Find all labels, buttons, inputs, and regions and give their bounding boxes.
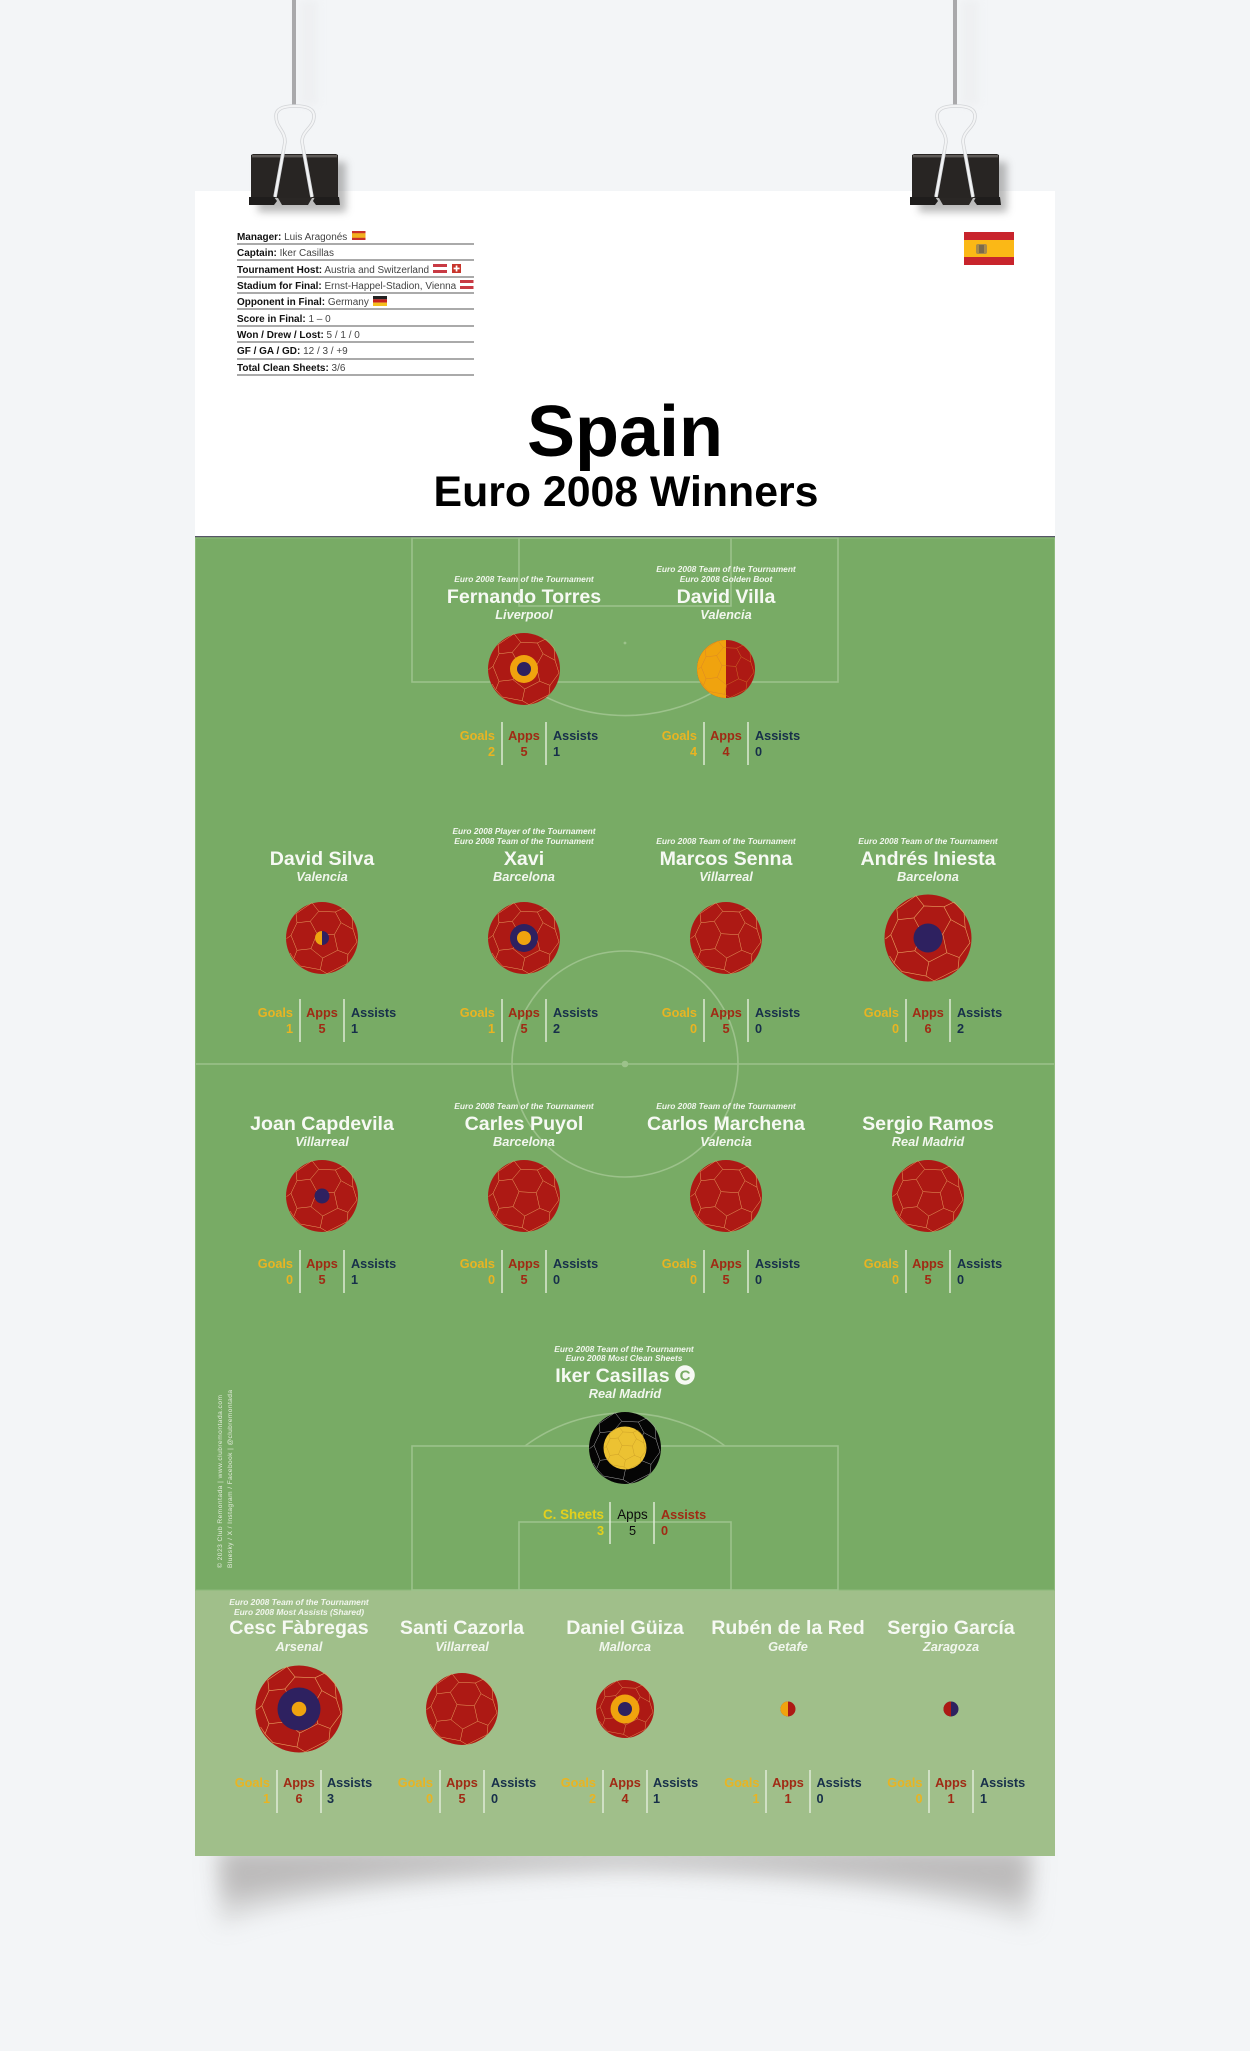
stats: 5: [318, 1022, 326, 1036]
substitute: Daniel Güiza: [561, 1617, 698, 1813]
row: manager: [237, 231, 474, 244]
stats: 0: [957, 1273, 964, 1287]
stats: Goals: [258, 1257, 293, 1271]
substitute: Cesc Fàbregas: [229, 1597, 372, 1813]
stats: Assists: [653, 1776, 698, 1790]
stats: 0: [892, 1022, 899, 1036]
ball: [697, 640, 755, 698]
row: clean sheets: Total Clean Sheets: 3/6: [237, 363, 346, 374]
player: Xavi: [452, 826, 598, 1042]
ball: [690, 1160, 762, 1232]
subtitle: Euro 2008 Winners: [434, 468, 818, 516]
row: opponent: [237, 296, 474, 309]
substitute: Rubén de la Red: [711, 1617, 865, 1813]
player: Carlos Marchena: Euro 2008 Team of the Tournament: [656, 1101, 797, 1111]
stats: 0: [755, 1273, 762, 1287]
stats: 1: [351, 1022, 358, 1036]
player: Fernando Torres: Fernando Torres: [447, 586, 601, 608]
stats: 0: [488, 1273, 495, 1287]
substitute: Sergio García: Sergio García: [887, 1617, 1016, 1639]
stats: Assists: [755, 729, 800, 743]
player: David Silva: David Silva: [270, 848, 375, 870]
ball: [488, 633, 560, 705]
stats: Assists: [553, 1006, 598, 1020]
stats: Assists: [816, 1776, 862, 1790]
stats: 0: [553, 1273, 560, 1287]
stats: Assists: [351, 1006, 396, 1020]
stats: 5: [520, 745, 528, 759]
icon: left binder clip: [249, 106, 346, 212]
player: Carlos Marchena: Valencia: [700, 1134, 752, 1149]
player: Sergio Ramos: Sergio Ramos: [862, 1113, 994, 1135]
stats: [460, 999, 598, 1042]
row: opponent: Opponent in Final: Germany: [237, 297, 369, 308]
ball: [944, 1702, 958, 1716]
player: Fernando Torres: Liverpool: [495, 607, 553, 622]
stats: [543, 1502, 706, 1544]
player: Joan Capdevila: Joan Capdevila: [250, 1113, 395, 1135]
row: score: Score in Final: 1 – 0: [237, 314, 331, 325]
stats: 0: [661, 1524, 668, 1538]
stats: Assists: [755, 1257, 800, 1271]
stats: Goals: [662, 1257, 697, 1271]
player: David Villa: [656, 564, 800, 765]
credit: © 2023 Club Remontada | www.clubremontada.com: [216, 1394, 224, 1568]
stats: 2: [957, 1022, 964, 1036]
player: Carles Puyol: Euro 2008 Team of the Tournament: [454, 1101, 595, 1111]
row: manager: Manager: Luis Aragonés: [237, 232, 347, 243]
stats: 3: [327, 1792, 334, 1806]
stats: 0: [690, 1022, 697, 1036]
player: Andrés Iniesta: Andrés Iniesta: [860, 848, 997, 870]
player: Carlos Marchena: Carlos Marchena: [647, 1113, 806, 1135]
player: Marcos Senna: Villarreal: [699, 869, 753, 884]
substitute: Sergio García: Zaragoza: [922, 1639, 979, 1654]
player: Iker Casillas: Euro 2008 Team of the Tournament: [554, 1344, 695, 1354]
stats: 0: [286, 1273, 293, 1287]
stats: Assists: [755, 1006, 800, 1020]
stats: [460, 722, 598, 765]
stats: Goals: [460, 1006, 495, 1020]
stats: Apps: [710, 1006, 742, 1020]
stats: Goals: [864, 1006, 899, 1020]
stats: Apps: [446, 1776, 478, 1790]
ball: [780, 1702, 796, 1716]
stats: Apps: [508, 729, 540, 743]
stats: 1: [351, 1273, 358, 1287]
player: Iker Casillas: Euro 2008 Most Clean Sheets: [566, 1353, 683, 1363]
stats: 0: [915, 1792, 922, 1806]
stats: 0: [755, 745, 762, 759]
stats: Assists: [491, 1776, 536, 1790]
substitute: Sergio García: [887, 1617, 1025, 1813]
stats: 1: [784, 1792, 792, 1806]
icon: captain badge: C: [680, 1368, 691, 1384]
player: Marcos Senna: [656, 836, 800, 1042]
row: tournament host: [237, 264, 474, 277]
ball: [884, 894, 972, 982]
poster drop shadow: [215, 1850, 1035, 1925]
player: Iker Casillas: [543, 1344, 706, 1544]
stats: Apps: [306, 1257, 338, 1271]
stats: [662, 722, 800, 765]
player: David Villa: Euro 2008 Team of the Tournament: [656, 564, 797, 574]
player: Sergio Ramos: Real Madrid: [892, 1134, 965, 1149]
stats: 1: [263, 1792, 270, 1806]
stats: Goals: [864, 1257, 899, 1271]
substitute: Cesc Fàbregas: Arsenal: [275, 1639, 323, 1654]
substitute: Rubén de la Red: Getafe: [768, 1639, 808, 1654]
icon: Spain flag: [964, 232, 1014, 265]
substitute: Santi Cazorla: Villarreal: [435, 1639, 489, 1654]
player: Marcos Senna: Marcos Senna: [660, 848, 794, 870]
stats: [398, 1770, 536, 1813]
stats: C. Sheets: [543, 1507, 604, 1522]
stats: 0: [892, 1273, 899, 1287]
stats: Apps: [935, 1776, 967, 1790]
stats: [864, 1250, 1002, 1293]
stats: 5: [722, 1273, 730, 1287]
ball: [256, 1666, 342, 1752]
stats: Apps: [508, 1257, 540, 1271]
player: David Silva: Valencia: [296, 869, 348, 884]
stats: Apps: [912, 1006, 944, 1020]
player: Carles Puyol: Barcelona: [493, 1134, 555, 1149]
stats: Apps: [617, 1507, 648, 1522]
substitute: Daniel Güiza: Daniel Güiza: [566, 1617, 685, 1639]
player: Andrés Iniesta: Euro 2008 Team of the Tournament: [858, 836, 999, 846]
stats: Assists: [957, 1257, 1002, 1271]
stats: [258, 999, 396, 1042]
player: Fernando Torres: [447, 574, 601, 765]
substitute: Cesc Fàbregas: Euro 2008 Team of the Tournament: [229, 1597, 370, 1607]
substitutes band: [195, 1590, 1055, 1856]
substitute: Cesc Fàbregas: Cesc Fàbregas: [229, 1617, 369, 1639]
icon: captain badge: [675, 1365, 695, 1385]
player: Joan Capdevila: [250, 1113, 396, 1293]
pitch markings: [196, 538, 1054, 1590]
stats: [258, 1250, 396, 1293]
stats: 1: [653, 1792, 660, 1806]
substitute: Cesc Fàbregas: Euro 2008 Most Assists (Shared): [234, 1607, 364, 1617]
stats: 1: [947, 1792, 955, 1806]
stats: 1: [553, 745, 560, 759]
header rule: [195, 536, 1055, 537]
row: captain: Captain: Iker Casillas: [237, 248, 334, 259]
player: Joan Capdevila: Villarreal: [295, 1134, 349, 1149]
stats: Goals: [724, 1776, 760, 1790]
ball: [426, 1673, 498, 1745]
stats: 0: [426, 1792, 433, 1806]
stats: [235, 1770, 372, 1813]
stats: Apps: [912, 1257, 944, 1271]
stats: Assists: [327, 1776, 372, 1790]
ball: [596, 1680, 654, 1738]
stats: Apps: [710, 1257, 742, 1271]
player: Xavi: Euro 2008 Team of the Tournament: [454, 836, 595, 846]
stats: 5: [318, 1273, 326, 1287]
stats: Goals: [662, 729, 697, 743]
player: Andrés Iniesta: [858, 836, 1002, 1042]
stats: 6: [295, 1792, 303, 1806]
title: Spain: [527, 392, 723, 472]
stats: 2: [553, 1022, 560, 1036]
ball: [690, 902, 762, 974]
stats: Goals: [561, 1776, 596, 1790]
icon: right binder clip: [910, 106, 1007, 212]
stats: Assists: [661, 1508, 706, 1522]
player: Fernando Torres: Euro 2008 Team of the Tournament: [454, 574, 595, 584]
stats: 2: [488, 745, 495, 759]
stats: 5: [458, 1792, 466, 1806]
player: Carlos Marchena: [647, 1101, 806, 1293]
stats: [662, 999, 800, 1042]
stats: Goals: [235, 1776, 270, 1790]
substitute: Santi Cazorla: Santi Cazorla: [400, 1617, 525, 1639]
ball: [286, 902, 358, 974]
player: Iker Casillas: Real Madrid: [589, 1386, 662, 1401]
stats: 2: [589, 1792, 596, 1806]
stats: 1: [980, 1792, 987, 1806]
row: tournament host: Tournament Host: Austria and Switzerland: [237, 265, 429, 276]
stats: Apps: [283, 1776, 315, 1790]
stats: 0: [690, 1273, 697, 1287]
stats: Goals: [258, 1006, 293, 1020]
stats: 3: [597, 1524, 604, 1538]
row: stadium: Stadium for Final: Ernst-Happel-Stadion, Vienna: [237, 281, 457, 292]
stats: 0: [491, 1792, 498, 1806]
stats: 1: [286, 1022, 293, 1036]
stats: 5: [520, 1273, 528, 1287]
stats: [887, 1770, 1025, 1813]
player: David Villa: David Villa: [677, 586, 776, 608]
row: goals: GF / GA / GD: 12 / 3 / +9: [237, 346, 348, 357]
player: Iker Casillas: Iker Casillas: [555, 1365, 670, 1387]
stats: 4: [621, 1792, 629, 1806]
stats: Goals: [887, 1776, 922, 1790]
player: Xavi: Barcelona: [493, 869, 555, 884]
ball: [589, 1412, 661, 1484]
stats: 5: [629, 1524, 636, 1538]
substitute: Santi Cazorla: [398, 1617, 536, 1813]
stats: Apps: [306, 1006, 338, 1020]
credit: Bluesky / X / Instagram / Facebook | @clubremontada: [227, 1390, 234, 1568]
stats: 0: [816, 1792, 824, 1806]
stats: 4: [722, 745, 730, 759]
ball: [892, 1160, 964, 1232]
player: Xavi: Euro 2008 Player of the Tournament: [452, 826, 597, 836]
poster white header: [195, 191, 1055, 537]
player: David Silva: [258, 848, 396, 1042]
stats: Assists: [553, 729, 598, 743]
player: Sergio Ramos: [862, 1113, 1002, 1293]
stats: [460, 1250, 598, 1293]
hanging strings: [292, 0, 979, 105]
stats: Assists: [351, 1257, 396, 1271]
stats: 5: [520, 1022, 528, 1036]
player: David Villa: Valencia: [700, 607, 752, 622]
player: Carles Puyol: [454, 1101, 598, 1293]
stats: Apps: [508, 1006, 540, 1020]
substitute: Rubén de la Red: Rubén de la Red: [711, 1617, 865, 1639]
stats: Assists: [957, 1006, 1002, 1020]
stats: 0: [755, 1022, 762, 1036]
ball: [488, 1160, 560, 1232]
player: David Villa: Euro 2008 Golden Boot: [680, 574, 774, 584]
stats: Assists: [980, 1776, 1025, 1790]
stats: 1: [752, 1792, 760, 1806]
stats: 5: [924, 1273, 932, 1287]
pitch background: [195, 536, 1055, 1590]
ball: [488, 902, 560, 974]
stats: Goals: [398, 1776, 433, 1790]
stats: [561, 1770, 698, 1813]
player: Xavi: Xavi: [504, 848, 544, 870]
info table: [237, 231, 474, 375]
stats: Goals: [460, 1257, 495, 1271]
stats: [864, 999, 1002, 1042]
stats: 1: [488, 1022, 495, 1036]
credit: [216, 1390, 234, 1568]
stats: Goals: [662, 1006, 697, 1020]
substitute: Daniel Güiza: Mallorca: [599, 1639, 651, 1654]
stats: 6: [924, 1022, 932, 1036]
stats: Apps: [772, 1776, 804, 1790]
player: Carles Puyol: Carles Puyol: [465, 1113, 583, 1135]
stats: [662, 1250, 800, 1293]
ball: [286, 1160, 358, 1232]
stats: [724, 1770, 862, 1813]
player: Andrés Iniesta: Barcelona: [897, 869, 959, 884]
player: Marcos Senna: Euro 2008 Team of the Tournament: [656, 836, 797, 846]
stats: Apps: [710, 729, 742, 743]
row: record: Won / Drew / Lost: 5 / 1 / 0: [237, 330, 360, 341]
stats: Assists: [553, 1257, 598, 1271]
stats: 5: [722, 1022, 730, 1036]
stats: 4: [690, 745, 697, 759]
stats: Apps: [609, 1776, 641, 1790]
stats: Goals: [460, 729, 495, 743]
